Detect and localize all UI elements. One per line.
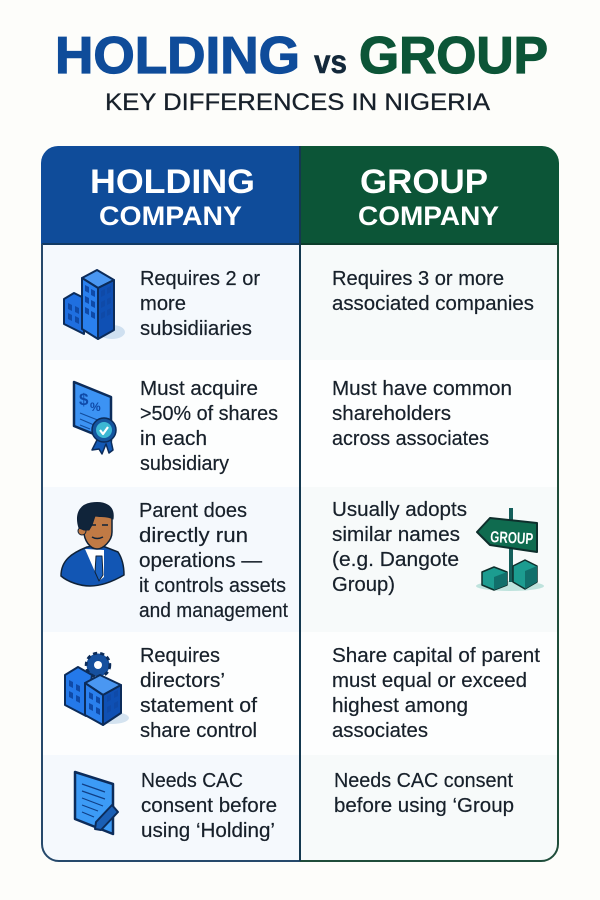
- text: group row 3: Group): [332, 573, 395, 596]
- text: holding row 2: >50% of shares: [140, 402, 278, 425]
- title: vs: [314, 43, 347, 80]
- icon: document and pen: [75, 772, 118, 834]
- text: group row 3: similar names: [332, 523, 460, 546]
- column header: holding company: COMPANY: [99, 201, 242, 231]
- icon: businessman: [61, 503, 124, 586]
- subtitle: KEY DIFFERENCES IN NIGERIA: [105, 89, 490, 116]
- text: holding row 5: using ‘Holding’: [141, 819, 275, 842]
- text: group row 4: associates: [332, 719, 428, 742]
- text: holding row 5: Needs CAC: [141, 769, 243, 792]
- text: holding row 1: [140, 267, 260, 340]
- text: holding row 3: it controls assets: [139, 574, 286, 597]
- text: holding row 4: Requires: [140, 644, 220, 667]
- text: group row 2: Must have common: [332, 377, 512, 400]
- text: group row 5: Needs CAC consent: [334, 769, 513, 792]
- text: holding row 4: share control: [140, 719, 257, 742]
- text: group row 2: [332, 377, 512, 450]
- text: holding row 2: [140, 377, 278, 475]
- text: holding row 5: consent before: [141, 794, 277, 817]
- column header: group company: GROUP: [360, 163, 488, 201]
- icon: group signpost: GROUP: [490, 529, 534, 548]
- text: group row 5: before using ‘Group: [334, 794, 514, 817]
- text: holding row 1: Requires 2 or: [140, 267, 260, 290]
- text: group row 4: must equal or exceed: [332, 669, 527, 692]
- icon: group signpost: [476, 508, 544, 591]
- text: holding row 2: in each: [140, 427, 207, 450]
- text: group row 4: [332, 644, 540, 742]
- title: GROUP: [359, 27, 548, 85]
- text: group row 3: [332, 498, 467, 596]
- text: group row 3: Usually adopts: [332, 498, 467, 521]
- text: group row 2: shareholders: [332, 402, 451, 425]
- icon: buildings with gear: [65, 654, 129, 725]
- text: group row 5: [334, 769, 514, 817]
- text: group row 1: associated companies: [332, 292, 534, 315]
- icon: share certificate: $: [79, 390, 89, 409]
- text: group row 4: Share capital of parent: [332, 644, 540, 667]
- text: holding row 3: and management: [139, 599, 288, 622]
- text: group row 3: (e.g. Dangote: [332, 548, 459, 571]
- text: holding row 3: operations —: [139, 549, 262, 572]
- text: holding row 1: more: [140, 292, 186, 315]
- icon: share certificate: %: [90, 400, 101, 414]
- column header: group company: [300, 146, 559, 244]
- text: holding row 5: [141, 769, 277, 842]
- text: holding row 4: directors’: [140, 669, 225, 692]
- text: group row 1: Requires 3 or more: [332, 267, 504, 290]
- title: HOLDING: [55, 27, 300, 85]
- title: [55, 27, 548, 85]
- text: holding row 3: directly run: [139, 524, 248, 547]
- text: holding row 4: [140, 644, 257, 742]
- column header: holding company: HOLDING: [90, 163, 255, 201]
- text: holding row 3: [139, 499, 288, 622]
- text: holding row 2: Must acquire: [140, 377, 258, 400]
- icon: office buildings: [64, 270, 125, 339]
- text: holding row 3: Parent does: [139, 499, 247, 522]
- text: holding row 1: subsidiiaries: [140, 317, 252, 340]
- text: group row 4: highest among: [332, 694, 468, 717]
- text: holding row 2: subsidiary: [140, 452, 230, 475]
- text: group row 2: across associates: [332, 427, 489, 450]
- column header: holding company: [41, 146, 300, 244]
- icon: share certificate: [74, 382, 116, 454]
- column header: group company: COMPANY: [358, 201, 499, 231]
- text: holding row 4: statement of: [140, 694, 257, 717]
- comparison table: [41, 146, 559, 861]
- text: group row 1: [332, 267, 534, 315]
